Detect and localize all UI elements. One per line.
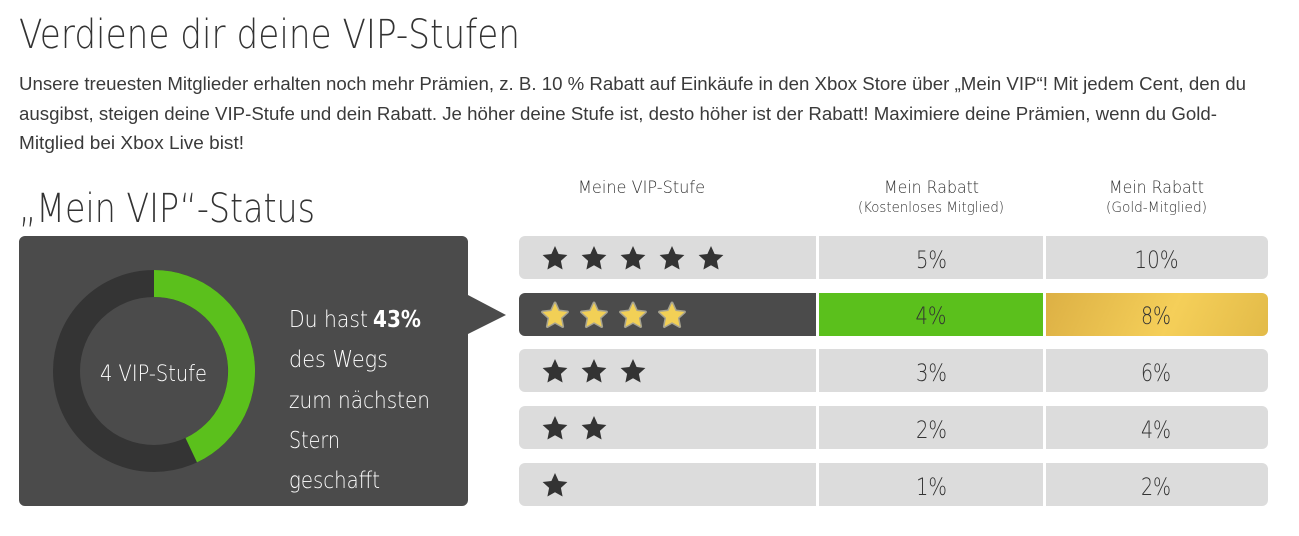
discount values: 4% [916, 302, 946, 330]
discount values: 4% [1141, 416, 1171, 444]
discount values: 6% [1141, 359, 1171, 387]
row: four stars, current level [519, 293, 1268, 336]
intro paragraph [19, 74, 1246, 153]
discount values: 10% [1134, 246, 1178, 274]
discount values: 1% [916, 473, 947, 501]
donut chart: 43 percent progress [66, 270, 255, 462]
progress text: geschafft [289, 468, 380, 494]
panel: VIP status callout [19, 236, 506, 506]
discount values: 5% [916, 246, 947, 274]
discount values [916, 246, 1178, 274]
title: Verdiene dir deine VIP-Stufen [19, 12, 520, 58]
discount values: 2% [916, 416, 947, 444]
column heading: VIP level: Meine VIP-Stufe [578, 178, 705, 198]
callout background with arrow [19, 236, 506, 506]
icon: four gold stars [543, 303, 684, 326]
section heading: Mein VIP status: „Mein VIP“-Status [19, 186, 315, 232]
intro paragraph: Mitglied bei Xbox Live bist! [19, 133, 244, 153]
column heading: discount gold member: Mein Rabatt [1109, 178, 1204, 198]
row: two stars [519, 406, 1268, 449]
row: one star [519, 463, 1268, 506]
progress text: Du hast [289, 307, 368, 333]
discount values [916, 473, 1171, 501]
column heading: discount free member: Mein Rabatt [884, 178, 979, 198]
intro paragraph: ausgibst, steigen deine VIP-Stufe und dein Rabatt. Je höher deine Stufe ist, desto höher ist der Rabatt! Maximiere deine Prämien, wenn du Gold- [19, 104, 1217, 124]
icon: two dark stars [543, 416, 606, 440]
row: three stars [519, 349, 1268, 392]
progress text: des Wegs [289, 347, 388, 373]
progress text: 43% [373, 307, 421, 333]
progress text: zum nächsten [289, 388, 430, 414]
column heading: discount free member: (Kostenloses Mitglied) [858, 200, 1004, 216]
discount values [916, 359, 1171, 387]
progress text [289, 307, 430, 494]
discount values: 3% [916, 359, 947, 387]
column heading: discount gold member [1106, 178, 1207, 216]
icon: five dark stars [543, 246, 723, 270]
donut label: 4 VIP-Stufe [100, 362, 207, 387]
progress text: Stern [289, 428, 340, 454]
icon: one dark star [543, 473, 567, 496]
discount values: 8% [1141, 302, 1171, 330]
column heading: discount free member [858, 178, 1004, 216]
icon: three dark stars [543, 359, 645, 382]
discount values [916, 302, 1171, 330]
discount values: 2% [1141, 473, 1171, 501]
row: five stars [519, 236, 1268, 279]
intro paragraph: Unsere treuesten Mitglieder erhalten noch mehr Prämien, z. B. 10 % Rabatt auf Einkäufe in den Xbox Store über „Mein VIP“! Mit jedem Cent, den du [19, 74, 1246, 94]
discount values [916, 416, 1171, 444]
column heading: discount gold member: (Gold-Mitglied) [1106, 200, 1207, 216]
